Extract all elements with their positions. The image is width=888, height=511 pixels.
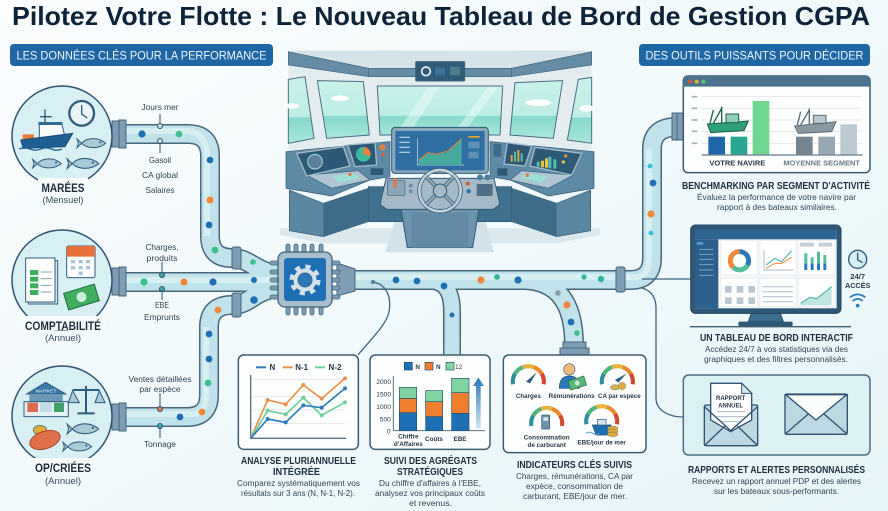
pipe data particles xyxy=(138,130,656,420)
stacked bar chart: N xyxy=(436,364,441,371)
panel: benchmarking: rapport à des bateaux similaires. xyxy=(717,202,837,212)
panel: indicateurs clés: EBE/jour de mer xyxy=(577,439,626,446)
panel: indicateurs clés: de carburant xyxy=(527,442,567,449)
pipe flanges xyxy=(112,113,683,431)
panel: benchmarking: Évaluez la performance de votre navire par xyxy=(697,192,856,202)
illustration: ship bridge control room xyxy=(280,51,600,252)
monitor with dashboard: 24/7 xyxy=(850,272,865,281)
line chart: N, N-1, N-2: N xyxy=(269,363,275,372)
pipe data labels: CA global xyxy=(142,170,178,180)
panel: rapports et alertes xyxy=(683,375,870,496)
panel: tableau de bord interactif: UN TABLEAU DE BORD INTERACTIF xyxy=(700,332,853,344)
icon: clock xyxy=(849,250,867,268)
stacked bar chart: 500 xyxy=(380,416,391,423)
source: OP / criées: OP/CRIÉES xyxy=(35,460,91,475)
panel: rapports et alertes: sur les bateaux sous-performants. xyxy=(714,486,839,496)
pipe data labels: par espèce xyxy=(140,384,181,394)
panel: tableau de bord interactif: graphiques et des filtres personnalisés. xyxy=(704,354,848,364)
line chart: N, N-1, N-2: N-1 xyxy=(295,363,309,372)
icon: fish market, scale, seafood: MARKET xyxy=(36,388,56,394)
line chart: N, N-1, N-2: N-2 xyxy=(329,363,342,372)
panel: indicateurs clés xyxy=(503,355,646,501)
pipe data labels: produits xyxy=(146,253,178,263)
panel: suivi des agrégats: SUIVI DES AGRÉGATS xyxy=(384,454,477,467)
source: OP / criées xyxy=(12,366,112,487)
bar comparison window xyxy=(683,76,870,173)
panel: suivi des agrégats xyxy=(370,355,490,508)
icon: person with money xyxy=(559,364,587,390)
panel: analyse pluriannuelle: Comparez systématiquement vos xyxy=(237,478,360,488)
bar comparison window: VOTRE NAVIRE xyxy=(709,159,765,168)
panel: rapports et alertes: Recevez un rapport annuel PDP et des alertes xyxy=(692,476,861,486)
panel: indicateurs clés: expèce, consommation de xyxy=(526,481,623,491)
panel: indicateurs clés: Rémunérations xyxy=(549,393,595,400)
pipe data labels: EBE xyxy=(155,300,169,310)
icon: gauge CA xyxy=(602,366,633,390)
panel: suivi des agrégats: STRATÉGIQUES xyxy=(397,465,463,478)
panel: indicateurs clés: carburant, EBE/jour de mer. xyxy=(523,491,627,501)
stacked bar chart: N xyxy=(415,364,420,371)
icon: gauge charges xyxy=(513,366,544,384)
stacked bar chart: 12 xyxy=(455,364,463,371)
stacked bar chart: 1500 xyxy=(376,392,391,399)
stacked bar chart: 0 xyxy=(387,428,391,435)
icon: gauge fuel xyxy=(531,408,562,429)
stacked bar chart: 1000 xyxy=(376,404,391,411)
icon: envelope with annual report: ANNUEL xyxy=(718,403,743,409)
connector lines to panels xyxy=(358,279,691,417)
pipe data labels: Emprunts xyxy=(144,312,180,322)
stacked bar chart: Coûts xyxy=(425,436,443,443)
bar comparison window: MOYENNE SEGMENT xyxy=(783,159,861,168)
panel: analyse pluriannuelle xyxy=(237,355,360,498)
source: comptabilité xyxy=(12,230,112,344)
banner: right section heading: DES OUTILS PUISSANTS POUR DÉCIDER xyxy=(646,48,864,62)
panel: indicateurs clés: Consommation xyxy=(524,435,570,442)
pipe data labels: Charges, xyxy=(146,242,178,252)
monitor with dashboard xyxy=(690,225,870,327)
panel: indicateurs clés: CA par espèce xyxy=(598,393,641,400)
source: marées: (Mensuel) xyxy=(42,195,84,206)
pipe data labels: Tonnage xyxy=(144,439,176,449)
panel: suivi des agrégats: Du chiffre d'affaires à l'EBE, xyxy=(379,478,481,488)
panel: tableau de bord interactif: Accédez 24/7 à vos statistiques via des xyxy=(705,344,848,354)
pipe data labels: Gasoil xyxy=(149,155,171,165)
icon: gauge ship xyxy=(586,406,618,437)
pipes: data flow network xyxy=(112,113,683,431)
icon: grey vessel xyxy=(795,108,836,133)
line chart: N, N-1, N-2 xyxy=(238,355,358,449)
icon: gear xyxy=(292,267,318,293)
central processor chip xyxy=(270,244,355,315)
banner: right section heading xyxy=(639,44,870,66)
panel: indicateurs clés: INDICATEURS CLÉS SUIVIS xyxy=(517,458,632,471)
connector end node xyxy=(371,280,375,284)
stacked bar chart: d'Affaires xyxy=(394,441,423,448)
title: Pilotez Votre Flotte : Le Nouveau Tableau de Bord de Gestion CGPA xyxy=(12,1,870,31)
icon: ledger, calendar and banknotes xyxy=(26,246,99,310)
icon: sealed envelope xyxy=(785,394,847,434)
panel: indicateurs clés: Charges, rémunérations, CA par xyxy=(516,471,633,481)
panel: suivi des agrégats: analysez vos principaux coûts xyxy=(375,488,485,498)
icon: envelope with annual report xyxy=(704,383,758,446)
panel: tableau de bord interactif xyxy=(690,225,870,364)
pipe data labels: Salaires xyxy=(146,185,174,195)
panel: indicateurs clés: Charges xyxy=(516,393,541,400)
source: OP / criées: (Annuel) xyxy=(45,476,81,487)
panel: suivi des agrégats: et revenus. xyxy=(409,498,452,508)
stacked bar chart: 2000 xyxy=(376,379,391,386)
stacked bar chart: Chiffre xyxy=(398,434,419,441)
source: comptabilité: (Annuel) xyxy=(45,333,81,344)
panel: analyse pluriannuelle: INTÉGRÉE xyxy=(273,465,320,478)
source: comptabilité: COMPTABILITÉ xyxy=(25,318,101,333)
panel: benchmarking xyxy=(682,76,870,212)
pipe data labels xyxy=(128,102,192,449)
icon: green vessel xyxy=(707,107,748,133)
banner: left section heading: LES DONNÉES CLÉS POUR LA PERFORMANCE xyxy=(16,48,266,62)
pipe data labels: Jours mer xyxy=(142,102,179,112)
icon: trawler, clock and fish xyxy=(19,101,106,168)
icon: envelope with annual report: RAPPORT xyxy=(716,396,746,402)
panel: analyse pluriannuelle: résultats sur 3 ans (N, N-1, N-2). xyxy=(241,488,355,498)
stacked bar chart xyxy=(370,355,490,449)
source: marées: MARÉES xyxy=(42,180,84,195)
source: marées xyxy=(12,86,112,206)
panel: analyse pluriannuelle: ANALYSE PLURIANNUELLE xyxy=(241,455,356,467)
icon: wifi xyxy=(850,294,865,307)
pipe data labels: Ventes détaillées xyxy=(128,374,192,384)
monitor with dashboard: ACCÈS xyxy=(845,281,870,290)
stacked bar chart: EBE xyxy=(453,436,467,443)
banner: left section heading xyxy=(10,44,273,66)
